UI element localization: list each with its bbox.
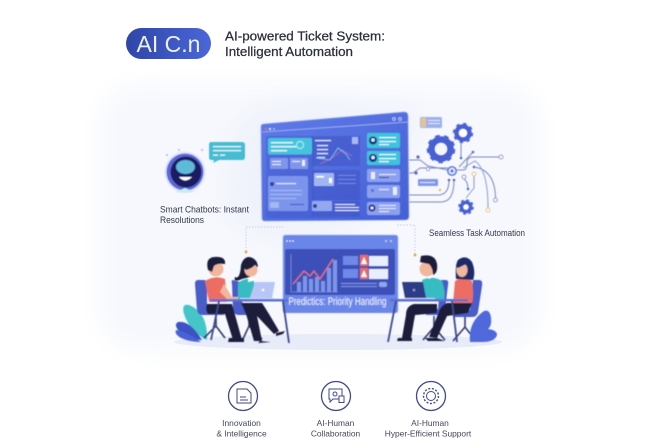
- label: smart chatbots: [160, 204, 249, 226]
- dashboard: right list cards: [367, 133, 400, 215]
- gear: medium: [454, 124, 472, 142]
- circuit end nodes: [414, 151, 503, 212]
- man: [397, 255, 445, 341]
- icon: chat bubble: [209, 142, 245, 163]
- floor shadow: [174, 334, 502, 350]
- desk: [210, 299, 289, 343]
- small label tag: [418, 179, 438, 186]
- main dashboard screen: [261, 112, 409, 221]
- label: ai-human collaboration: AI-Human: [317, 418, 355, 428]
- icon: brain bot: [164, 149, 206, 193]
- gear: small: [459, 200, 473, 214]
- chairs: [195, 280, 262, 339]
- line chart: [291, 254, 338, 292]
- laptop: [240, 282, 275, 300]
- gear: large: [428, 136, 454, 162]
- icon: hyper-efficient support: [416, 382, 446, 410]
- logo pill: AI C.n: [137, 31, 200, 57]
- man: [205, 257, 244, 342]
- people group left: [195, 257, 289, 343]
- laptop: [402, 282, 435, 300]
- panel: smart chatbots: [164, 142, 245, 193]
- label: innovation and intelligence: [216, 418, 267, 438]
- icon: ai-human collaboration: [322, 382, 350, 410]
- small message tag: [420, 117, 442, 128]
- secondary screen: predictics: [283, 235, 398, 313]
- logo pill: [126, 28, 211, 59]
- label: smart chatbots: Smart Chatbots: Instant: [160, 204, 249, 216]
- left plant: [176, 305, 207, 342]
- dashboard: centre chart: [312, 136, 360, 217]
- chairs: [423, 280, 482, 341]
- desk: [388, 299, 468, 342]
- circuit lines and gears: seamless task automation: [409, 117, 503, 214]
- text: predictics label: Predictics: Priority Handling: [288, 296, 387, 308]
- label: innovation and intelligence: Innovation: [222, 418, 261, 428]
- people group right: [388, 255, 497, 342]
- right plant: [470, 311, 497, 342]
- label: hyper-efficient support: [385, 418, 472, 438]
- label: ai-human collaboration: [311, 418, 361, 438]
- alert rows: [341, 255, 388, 287]
- label: ai-human collaboration: Collaboration: [311, 428, 361, 438]
- icon: innovation and intelligence: [228, 382, 258, 410]
- woman: [425, 257, 474, 341]
- label: innovation and intelligence: & Intelligence: [216, 428, 267, 438]
- title: [225, 28, 385, 59]
- dashboard: left panel: [266, 136, 314, 218]
- title: AI-powered Ticket System:: [225, 28, 385, 44]
- label: hyper-efficient support: Hyper-Efficient Support: [385, 428, 472, 438]
- label: smart chatbots: Resolutions: [160, 215, 204, 226]
- circuit hub node: [448, 167, 456, 175]
- connector: dashed lines between screens: [244, 225, 416, 256]
- title: Intelligent Automation: [225, 44, 353, 59]
- label: seamless task automation: Seamless Task Automation: [429, 228, 525, 239]
- woman: [235, 257, 285, 343]
- label: hyper-efficient support: AI-Human: [411, 418, 449, 428]
